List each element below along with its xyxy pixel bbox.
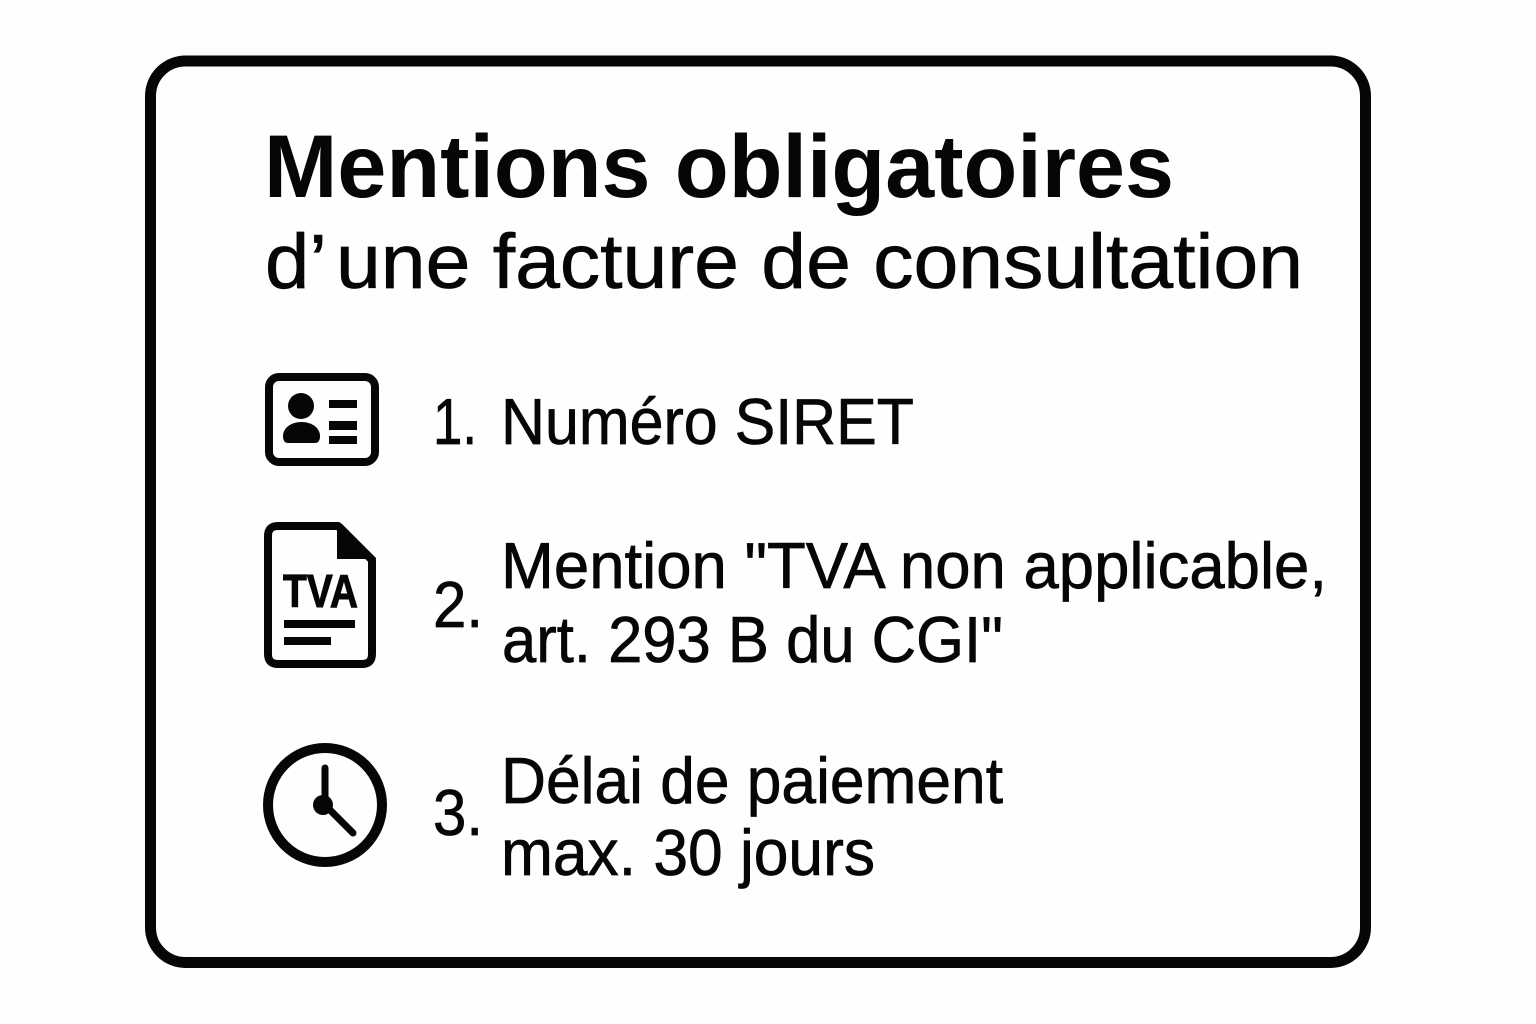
item 1: SIRET number: Numéro SIRET xyxy=(501,385,914,458)
item 2: VAT mention: 2. xyxy=(433,568,483,641)
item 2: VAT mention xyxy=(433,529,1327,676)
subtitle: d’ xyxy=(265,219,327,305)
icon: TVA document: TVA xyxy=(283,565,358,617)
item 2: VAT mention: art. 293 B du CGI" xyxy=(502,603,1003,676)
item 1: SIRET number: 1. xyxy=(433,385,477,458)
icon: clock xyxy=(268,748,382,862)
title: Mentions obligatoires xyxy=(264,116,1174,216)
item 3: payment deadline xyxy=(433,744,1003,889)
icon: TVA document xyxy=(268,524,376,664)
item 3: payment deadline: max. 30 jours xyxy=(501,816,875,889)
subtitle: une facture de consultation xyxy=(336,219,1303,305)
item 3: payment deadline: 3. xyxy=(433,776,483,849)
item 2: VAT mention: Mention "TVA non applicable, xyxy=(501,529,1327,602)
item 3: payment deadline: Délai de paiement xyxy=(501,744,1003,817)
panel: card frame xyxy=(150,61,1366,962)
icon: identity card xyxy=(269,377,375,462)
